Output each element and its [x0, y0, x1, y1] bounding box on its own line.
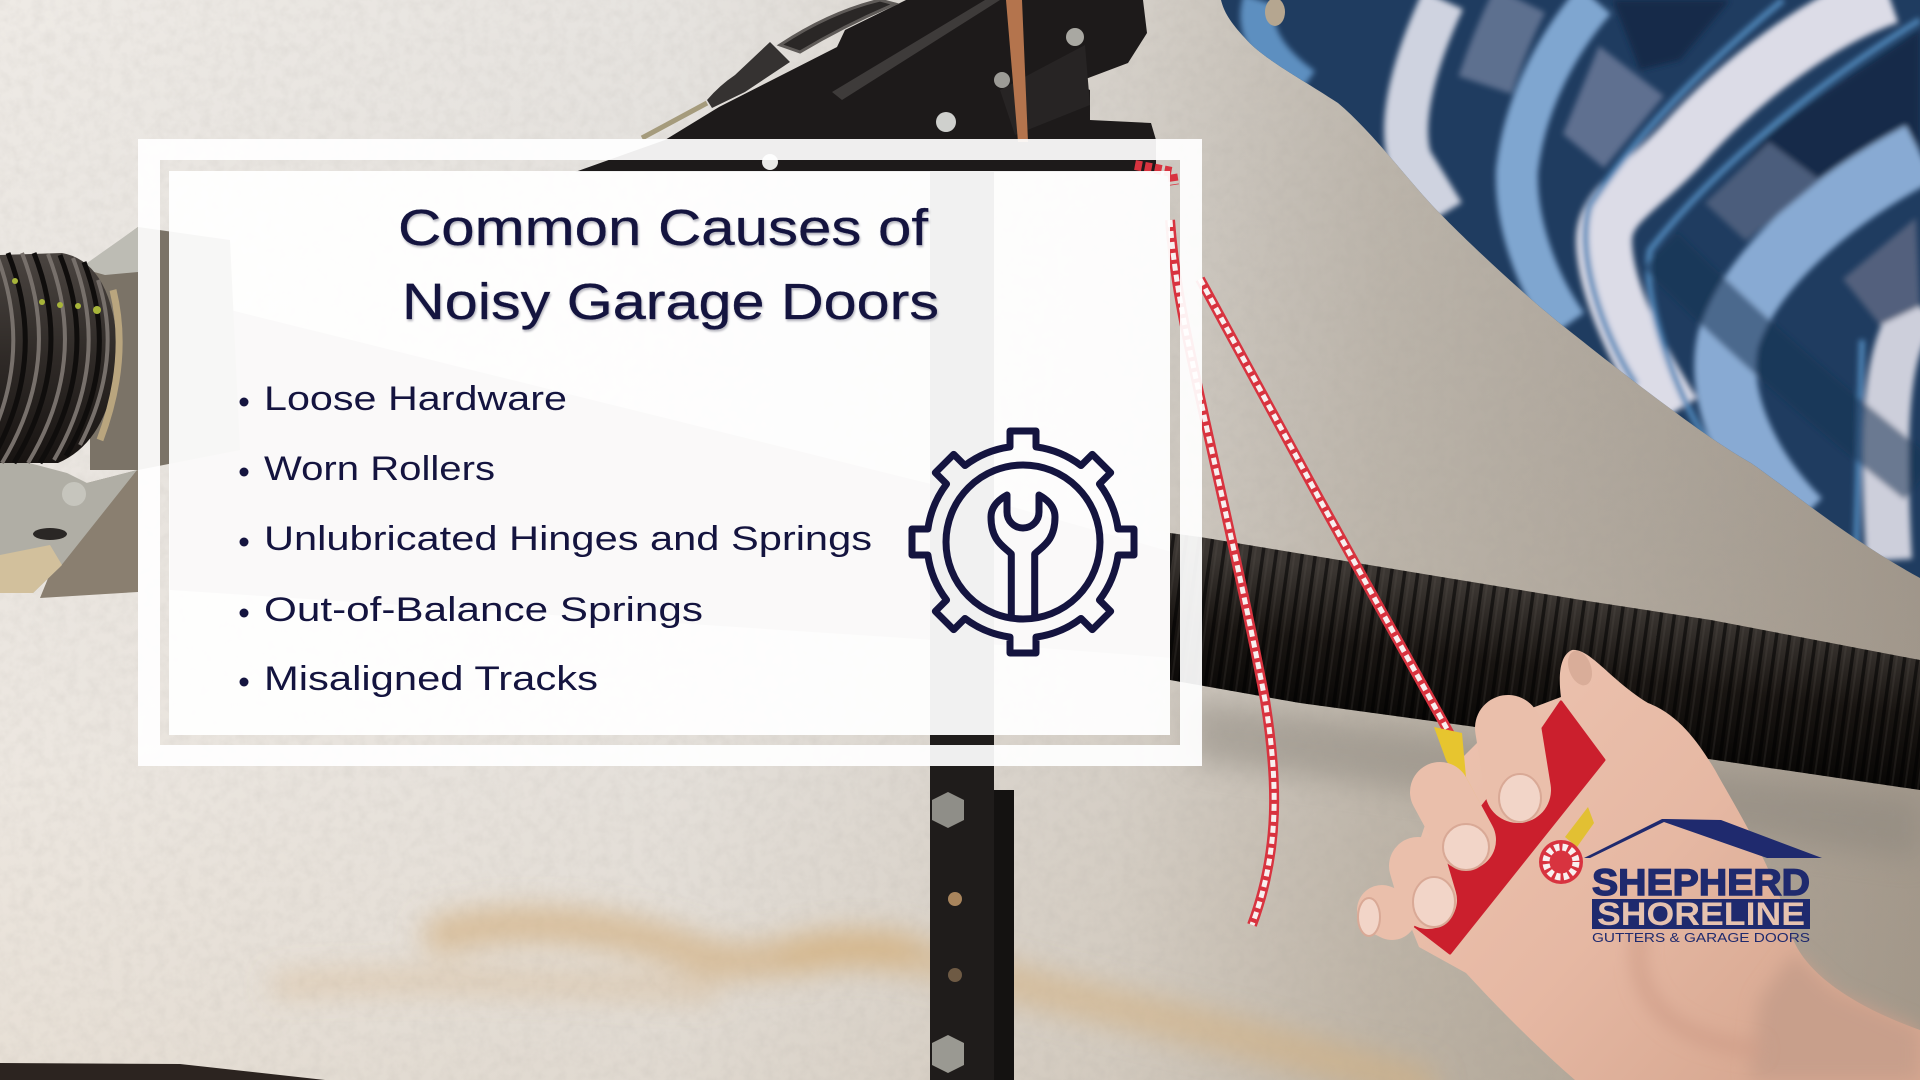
title: Common Causes of [398, 199, 929, 256]
door opener carriage [575, 0, 1156, 172]
cross shading [1660, 250, 1920, 480]
thin blue lines [1586, 0, 1783, 385]
torsion spring, right [1170, 533, 1920, 790]
wide pale stripe [1604, 0, 1889, 413]
light blue stripe [1517, 0, 1595, 325]
copper rod [1006, 0, 1028, 142]
metal hub and bracket [0, 227, 240, 598]
title [398, 199, 939, 330]
fingers [1382, 728, 1518, 915]
logo tagline: GUTTERS & GARAGE DOORS [1592, 931, 1810, 945]
pull rope, long loop [1170, 220, 1274, 925]
panel inner translucent card [169, 171, 1170, 735]
icon: gear with wrench [912, 431, 1134, 653]
pull rope, knot at top [1135, 165, 1174, 185]
cause: misaligned tracks: Misaligned Tracks [264, 660, 598, 698]
right pale stripe [1886, 306, 1920, 560]
cause: loose hardware: Loose Hardware [264, 380, 567, 418]
wrist shading [1750, 953, 1920, 1080]
dark panels [1613, 0, 1730, 70]
logo band text: SHORELINE [1597, 896, 1805, 932]
sleeve cuff [1257, 0, 1305, 85]
pull rope, taut line [1200, 279, 1457, 747]
logo band [1592, 899, 1810, 929]
cause: unlubricated hinges and springs: Unlubricated Hinges and Springs [264, 520, 872, 558]
hand holding red handle [1358, 647, 1920, 1080]
rope knot [1539, 840, 1583, 884]
vertical door track [930, 130, 1014, 1080]
torsion spring, left [0, 253, 119, 463]
water stains on wall [280, 925, 1420, 1080]
shirt button [1265, 0, 1285, 26]
logo roof [1584, 819, 1822, 858]
plaid shirt sleeve [1200, 0, 1920, 600]
red handle [1411, 702, 1604, 953]
cause: worn rollers: Worn Rollers [264, 450, 495, 488]
right grey checks [1705, 142, 1820, 241]
bullet list of causes [240, 380, 872, 698]
palm and wrist [1400, 650, 1920, 1080]
finger nails [1358, 774, 1541, 936]
dark floor edge [0, 1063, 325, 1080]
yellow tab [1565, 807, 1594, 847]
yellow cord sleeve [1434, 727, 1482, 807]
panel outer translucent frame [138, 139, 1202, 766]
palm crease [1638, 930, 1760, 1050]
logo: Shepherd Shoreline [1584, 819, 1822, 945]
thumb nail [1564, 647, 1596, 689]
right light blue stripe [1725, 153, 1920, 520]
title: Noisy Garage Doors [402, 273, 939, 330]
long door rail behind panel [170, 295, 1200, 660]
cause: out-of-balance springs: Out-of-Balance Springs [264, 591, 703, 629]
lavender stripe far left [1406, 0, 1443, 214]
logo wordmark: SHEPHERD [1592, 862, 1810, 903]
grey check [1563, 46, 1664, 168]
grey stripe [1485, 0, 1520, 85]
